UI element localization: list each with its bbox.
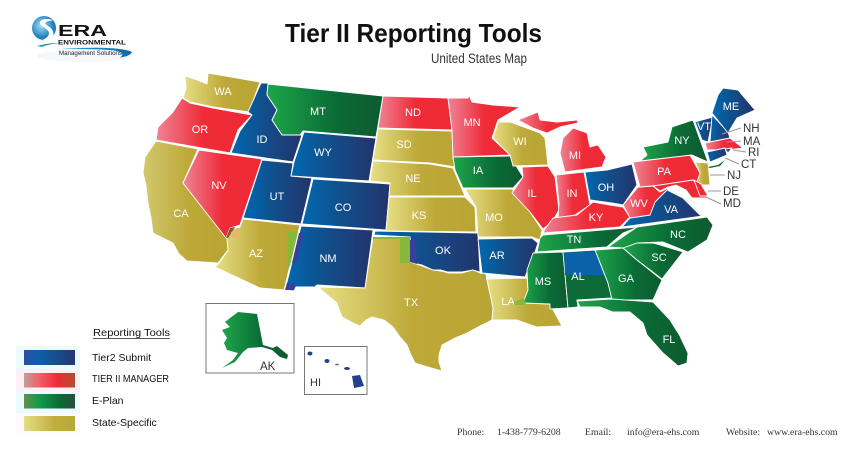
state: MO: MO (485, 212, 503, 224)
northeast leader lines and labels: DE (723, 186, 739, 198)
state: MI (518, 112, 606, 172)
state: MS (523, 252, 568, 309)
footer contact details (457, 427, 838, 438)
state: WY (291, 132, 376, 181)
state: LA: LA (501, 296, 515, 308)
state: RI (725, 148, 732, 153)
logo: ERA Environmental: ERA (58, 23, 108, 40)
state: SD (373, 129, 455, 167)
state: OK: OK (435, 245, 452, 257)
state: NV (183, 150, 262, 238)
state: MT: MT (310, 106, 326, 118)
state: PA (633, 155, 700, 187)
state: MN (448, 95, 520, 157)
state: IN (556, 172, 590, 218)
state: TN: TN (567, 234, 581, 246)
state: ND (378, 96, 452, 130)
state: TN (537, 227, 638, 252)
state: WY: WY (314, 147, 333, 159)
legend: TIER II MANAGER: TIER II MANAGER (92, 373, 169, 385)
state: VT: VT (697, 121, 711, 133)
footer contact details: www.era-ehs.com (767, 427, 838, 438)
state: CA (143, 141, 228, 263)
state: ND: ND (405, 107, 421, 119)
state: OH: OH (598, 182, 614, 194)
northeast leader lines and labels (706, 123, 761, 210)
state: NE: NE (405, 173, 421, 185)
state: AL (563, 250, 612, 308)
inset: Hawaii (304, 346, 367, 394)
inset: Hawaii: HI (310, 377, 321, 389)
inset: Alaska (206, 304, 294, 373)
state: CO (302, 179, 390, 230)
state: MO (465, 189, 542, 240)
northeast leader lines and labels: MD (723, 198, 741, 210)
title: Tier II Reporting Tools (285, 18, 542, 48)
state: KY: KY (589, 212, 604, 224)
state: TX (318, 237, 493, 371)
subtitle: United States Map (431, 51, 527, 66)
state: TX: TX (404, 297, 419, 309)
legend: E-Plan: E-Plan (92, 395, 124, 407)
state: ID: ID (256, 134, 268, 146)
state: ME (712, 88, 755, 133)
state: OR: OR (192, 124, 208, 136)
state: WI (493, 122, 548, 166)
legend: TIER II MANAGER (16, 369, 169, 391)
state: ME: ME (723, 101, 739, 113)
state: AZ (215, 219, 300, 290)
northeast leader lines and labels: MA (743, 136, 761, 148)
state: IN: IN (566, 188, 578, 200)
state: NY (640, 120, 708, 162)
northeast leader lines and labels: NJ (727, 170, 741, 182)
state: VA: VA (664, 204, 679, 216)
state: IA: IA (473, 165, 484, 177)
state: KY (543, 202, 630, 233)
state: FL (577, 299, 688, 366)
state: UT: UT (270, 191, 285, 203)
state: IA (453, 156, 523, 188)
legend: Tier2 Submit: Tier2 Submit (92, 352, 151, 364)
state: IL: IL (527, 188, 537, 200)
legend heading: Reporting Tools (93, 327, 170, 339)
state: WA: WA (214, 86, 232, 98)
state: NM (285, 226, 373, 291)
state: CA: CA (173, 208, 189, 220)
logo: ERA Environmental: ENVIRONMENTAL (58, 40, 126, 46)
legend (16, 327, 170, 435)
footer contact details: info@era-ehs.com (627, 427, 700, 438)
state: KS (386, 197, 476, 232)
state: MT (267, 84, 383, 137)
state: SD: SD (396, 139, 412, 151)
state: WV (623, 186, 670, 218)
state: MA (705, 138, 743, 150)
state: AZ: AZ (249, 248, 263, 260)
state: MN: MN (463, 117, 481, 129)
state: NV: NV (211, 180, 227, 192)
state: FL: FL (663, 334, 675, 346)
colour artifacts along western borders (226, 227, 526, 305)
state: NM: NM (319, 253, 337, 265)
state: LA (487, 278, 562, 327)
inset: Alaska: AK (260, 361, 276, 373)
state: WV: WV (630, 198, 649, 210)
state: KS: KS (412, 210, 426, 222)
legend: E-Plan (16, 391, 124, 413)
state: PA: PA (657, 166, 672, 178)
state: GA (595, 248, 662, 300)
state: UT (243, 160, 312, 224)
logo: ERA Environmental (32, 16, 133, 62)
northeast leader lines and labels: RI (748, 147, 760, 159)
state: CT (707, 148, 727, 162)
long island (708, 160, 725, 168)
footer contact details: Phone: (457, 427, 484, 438)
northeast leader lines and labels: CT (741, 159, 756, 171)
legend: State-Specific: State-Specific (92, 417, 157, 429)
state: IL (512, 166, 559, 229)
state: OH (585, 164, 637, 205)
state: VT (695, 117, 713, 142)
state: OK (374, 231, 480, 272)
state: NE (370, 161, 465, 196)
state: CO: CO (335, 202, 352, 214)
state: SC: SC (651, 252, 667, 264)
legend: State-Specific (16, 413, 157, 435)
state: OR (156, 98, 252, 153)
state: NJ (695, 162, 710, 185)
logo: ERA Environmental: Management Solutions (59, 51, 122, 57)
state: NC (608, 217, 713, 252)
state: GA: GA (618, 273, 635, 285)
footer contact details: Email: (585, 427, 611, 438)
state: WA (183, 73, 260, 112)
state: AL: AL (571, 271, 585, 283)
state: VA (622, 190, 703, 227)
northeast leader lines and labels: NH (743, 123, 760, 135)
state: MS: MS (535, 276, 551, 288)
state: MI: MI (569, 150, 581, 162)
state: NY: NY (674, 135, 690, 147)
legend: Tier2 Submit (16, 346, 151, 369)
state: SC (623, 243, 683, 279)
state: WI: WI (513, 136, 527, 148)
state: ID (231, 83, 302, 162)
state: AR: AR (489, 250, 505, 262)
map of US states (143, 73, 755, 371)
state: NC: NC (670, 229, 686, 241)
state: AR (478, 238, 538, 277)
footer contact details: Website: (726, 427, 760, 438)
state: MD and DE (653, 180, 708, 198)
state: NH (710, 115, 730, 142)
footer contact details: 1-438-779-6208 (497, 427, 561, 438)
